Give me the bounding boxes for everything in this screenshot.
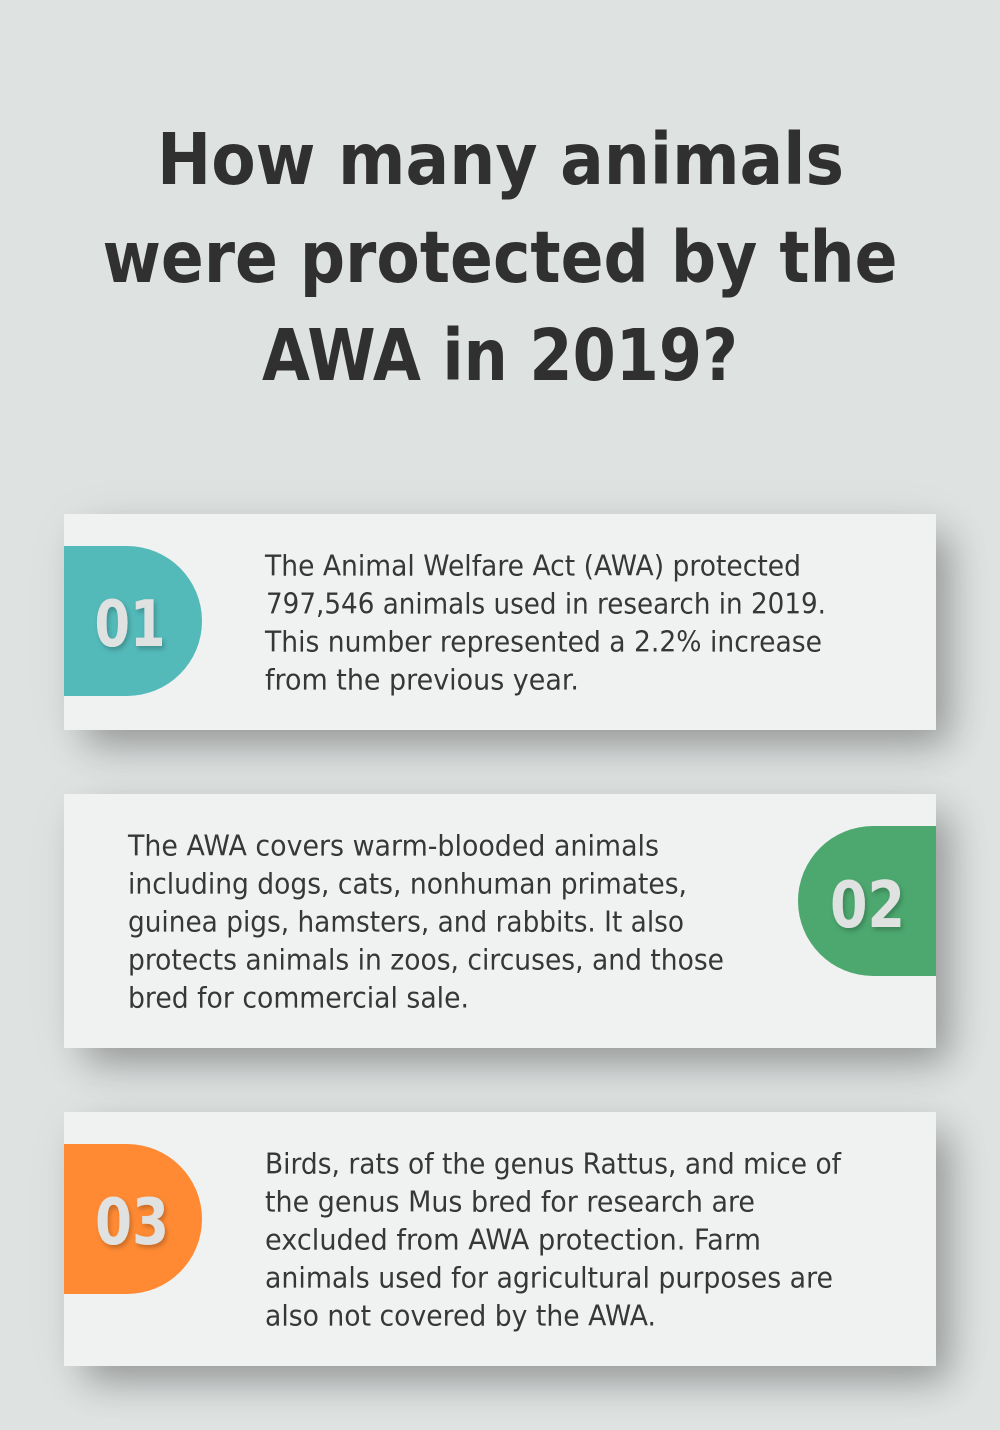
panel: card 03	[64, 1112, 948, 1380]
text block: card 01: This number represented a 2.2% increase	[264, 626, 822, 658]
title: were protected by the	[102, 216, 898, 299]
text block: card 02	[127, 830, 724, 1014]
text block: card 02: The AWA covers warm-blooded animals	[127, 830, 659, 862]
title: AWA in 2019?	[262, 314, 738, 397]
text block: card 02: guinea pigs, hamsters, and rabbits. It also	[128, 906, 684, 938]
title	[102, 118, 898, 397]
panel: card 01	[64, 514, 948, 744]
panel: card 02	[64, 794, 948, 1062]
icon: badge 03: 03	[95, 1186, 169, 1260]
text block: card 01	[264, 550, 826, 696]
text block: card 03: also not covered by the AWA.	[265, 1300, 656, 1332]
text block: card 03: Birds, rats of the genus Rattus, and mice of	[265, 1148, 842, 1180]
icon: badge 01	[64, 546, 202, 696]
text block: card 01: 797,546 animals used in research in 2019.	[266, 588, 826, 620]
text block: card 02: protects animals in zoos, circuses, and those	[128, 944, 724, 976]
text block: card 01: The Animal Welfare Act (AWA) protected	[264, 550, 801, 582]
icon: badge 01: 01	[94, 588, 166, 662]
text block: card 02: bred for commercial sale.	[128, 982, 469, 1014]
icon: badge 02	[798, 826, 936, 976]
text block: card 03	[265, 1148, 842, 1332]
text block: card 03: the genus Mus bred for research are	[265, 1186, 755, 1218]
title: How many animals	[157, 118, 844, 201]
text block: card 01: from the previous year.	[265, 664, 579, 696]
text block: card 02: including dogs, cats, nonhuman primates,	[128, 868, 687, 900]
icon: badge 02: 02	[830, 869, 905, 943]
icon: badge 03	[64, 1144, 202, 1294]
text block: card 03: excluded from AWA protection. Farm	[265, 1224, 761, 1256]
text block: card 03: animals used for agricultural purposes are	[265, 1262, 833, 1294]
